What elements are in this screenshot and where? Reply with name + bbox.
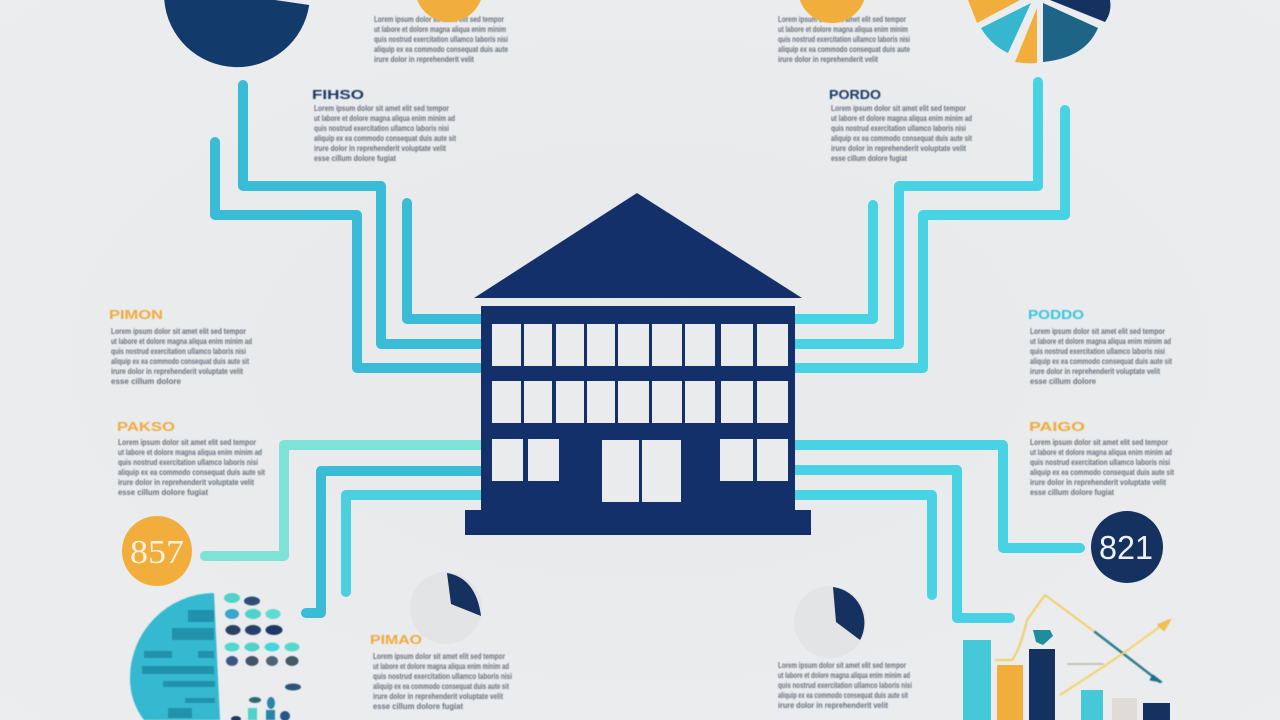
text block: PORDO: aliquip ex ea commodo consequat duis aute sit [831,134,972,143]
text block: top right: irure dolor in reprehenderit velit [778,55,878,64]
text block: PIMON: ut labore et dolore magna aliqua enim minim ad [111,337,252,346]
bars [963,640,1170,720]
text block: PIMAO: aliquip ex ea commodo consequat duis aute sit [373,682,509,691]
stat circle: orange 857: 857 [130,534,184,571]
pie chart: small lower right [794,586,866,658]
windows: second row [492,381,788,423]
text block: PORDO: quis nostrud exercitation ullamco laboris nisi [831,124,966,133]
text block: PIMON: quis nostrud exercitation ullamco laboris nisi [111,347,246,356]
marker: teal gem [1033,630,1053,645]
text block: PODDO: aliquip ex ea commodo consequat duis aute sit [1030,357,1172,366]
text block: PODDO: ut labore et dolore magna aliqua enim minim ad [1030,337,1171,346]
text block: PAKSO: aliquip ex ea commodo consequat duis aute sit [118,468,265,477]
text block: top right: aliquip ex ea commodo consequat duis aute [778,45,911,54]
text block: bottom right [778,661,912,710]
text block: PIMON: aliquip ex ea commodo consequat duis aute sit [111,357,249,366]
text block: PAKSO: quis nostrud exercitation ullamco laboris nisi [118,458,258,467]
text block: FIHSO: ut labore et dolore magna aliqua enim minim ad [314,114,455,123]
pie chart: top right segments [968,0,1110,63]
trend line: ascending [1060,620,1170,695]
text block: top left: aliquip ex ea commodo consequat duis aute [374,45,509,54]
text block: PORDO: irure dolor in reprehenderit voluptate velit [831,144,966,153]
text block: top left: irure dolor in reprehenderit velit [374,55,474,64]
text block: top left: quis nostrud exercitation ullamco laboris nisi [374,35,508,44]
text block: FIHSO: aliquip ex ea commodo consequat duis aute sit [314,134,456,143]
text block: PORDO: PORDO [829,87,881,102]
text block: PAIGO: PAIGO [1029,419,1085,434]
text block: PODDO: irure dolor in reprehenderit voluptate velit [1030,367,1160,376]
text block: PIMAO: ut labore et dolore magna aliqua enim minim ad [373,662,509,671]
text block: PAKSO: ut labore et dolore magna aliqua enim minim ad [118,448,262,457]
text block: bottom right: quis nostrud exercitation ullamco laboris nisi [778,681,912,690]
building roof [474,193,802,298]
connector pipes: lower left [205,445,482,613]
text block: PIMON: Lorem ipsum dolor sit amet elit sed tempor [111,327,246,336]
text block: PAKSO: Lorem ipsum dolor sit amet elit sed tempor [118,438,256,447]
text block: top left [374,15,509,64]
text block: PORDO [829,87,972,163]
text block: bottom right: irure dolor in reprehenderit velit [778,701,888,710]
text block: PIMON: PIMON [109,307,163,322]
text block: PAIGO: aliquip ex ea commodo consequat duis aute sit [1030,468,1174,477]
dot matrix [224,593,301,720]
text block: PAIGO: esse cillum dolore fugiat [1030,488,1114,497]
text block: PORDO: Lorem ipsum dolor sit amet elit sed tempor [831,104,966,113]
text block: FIHSO: Lorem ipsum dolor sit amet elit sed tempor [314,104,449,113]
text block: PIMAO: Lorem ipsum dolor sit amet elit sed tempor [373,652,505,661]
building body [481,306,795,512]
text block: PIMON: irure dolor in reprehenderit voluptate velit [111,367,243,376]
text block: PIMON [109,307,252,386]
icon: central building [465,193,811,535]
door [602,440,681,502]
text block: bottom right: aliquip ex ea commodo consequat duis aute sit [778,691,908,700]
stat circle: navy 821: 821 [1099,529,1153,566]
text block: top left: ut labore et dolore magna aliqua enim minim [374,25,506,34]
text block: PIMAO: quis nostrud exercitation ullamco laboris nisi [373,672,512,681]
circle: top orange right [798,0,866,23]
windows: third row [492,439,788,481]
text block: top right [778,15,911,64]
trend line: descending [996,595,1162,682]
text block: PAKSO: esse cillum dolore fugiat [118,488,208,497]
text block: bottom right: ut labore et dolore magna aliqua enim minim ad [778,671,910,680]
text block: PIMAO: esse cillum dolore fugiat [373,702,463,711]
text block: bottom right: Lorem ipsum dolor sit amet elit sed tempor [778,661,906,670]
text block: PODDO: PODDO [1028,307,1084,322]
text block: FIHSO: irure dolor in reprehenderit voluptate velit [314,144,446,153]
text block: PODDO: Lorem ipsum dolor sit amet elit sed tempor [1030,327,1165,336]
circle: top orange left [415,0,483,22]
text block: FIHSO [312,87,456,163]
text block: top left: Lorem ipsum dolor sit amet elit sed tempor [374,15,504,24]
text block: PIMAO [370,632,512,711]
text block: PORDO: ut labore et dolore magna aliqua enim minim ad [831,114,972,123]
text block: PODDO: quis nostrud exercitation ullamco laboris nisi [1030,347,1165,356]
text block: top right: Lorem ipsum dolor sit amet elit sed tempor [778,15,906,24]
text block: PAKSO: PAKSO [117,419,175,434]
pie chart: top left navy [164,0,309,67]
connector pipes: upper left [215,85,482,368]
connector pipes: upper right [794,82,1065,368]
text block: PODDO [1028,307,1172,386]
text block: PAIGO [1029,419,1174,497]
text block: FIHSO: quis nostrud exercitation ullamco laboris nisi [314,124,449,133]
text block: PAKSO: irure dolor in reprehenderit voluptate velit [118,478,254,487]
connector pipes: lower right [794,445,1080,618]
text block: PODDO: esse cillum dolore [1030,377,1097,386]
building base [465,510,811,535]
text block: PORDO: esse cillum dolore fugiat [831,154,907,163]
text block: top right: ut labore et dolore magna aliqua enim minim [778,25,908,34]
text block: PAKSO [117,419,265,497]
text block: PAIGO: irure dolor in reprehenderit voluptate velit [1030,478,1166,487]
half disc data graphic [130,593,220,720]
text block: top right: quis nostrud exercitation ullamco laboris nisi [778,35,910,44]
pie chart: small lower left [410,572,482,644]
windows: first row [492,324,788,366]
text block: PAIGO: Lorem ipsum dolor sit amet elit sed tempor [1030,438,1168,447]
text block: FIHSO: FIHSO [312,87,364,102]
text block: PIMAO: PIMAO [370,632,422,647]
text block: PAIGO: ut labore et dolore magna aliqua enim minim ad [1030,448,1172,457]
bar chart with trend lines [963,595,1170,720]
text block: FIHSO: esse cillum dolore fugiat [314,154,396,163]
stat circle: orange 857 [122,516,192,586]
text block: PIMAO: irure dolor in reprehenderit voluptate velit [373,692,503,701]
stat circle: navy 821 [1091,511,1163,583]
text block: PAIGO: quis nostrud exercitation ullamco laboris nisi [1030,458,1170,467]
text block: PIMON: esse cillum dolore [111,377,182,386]
